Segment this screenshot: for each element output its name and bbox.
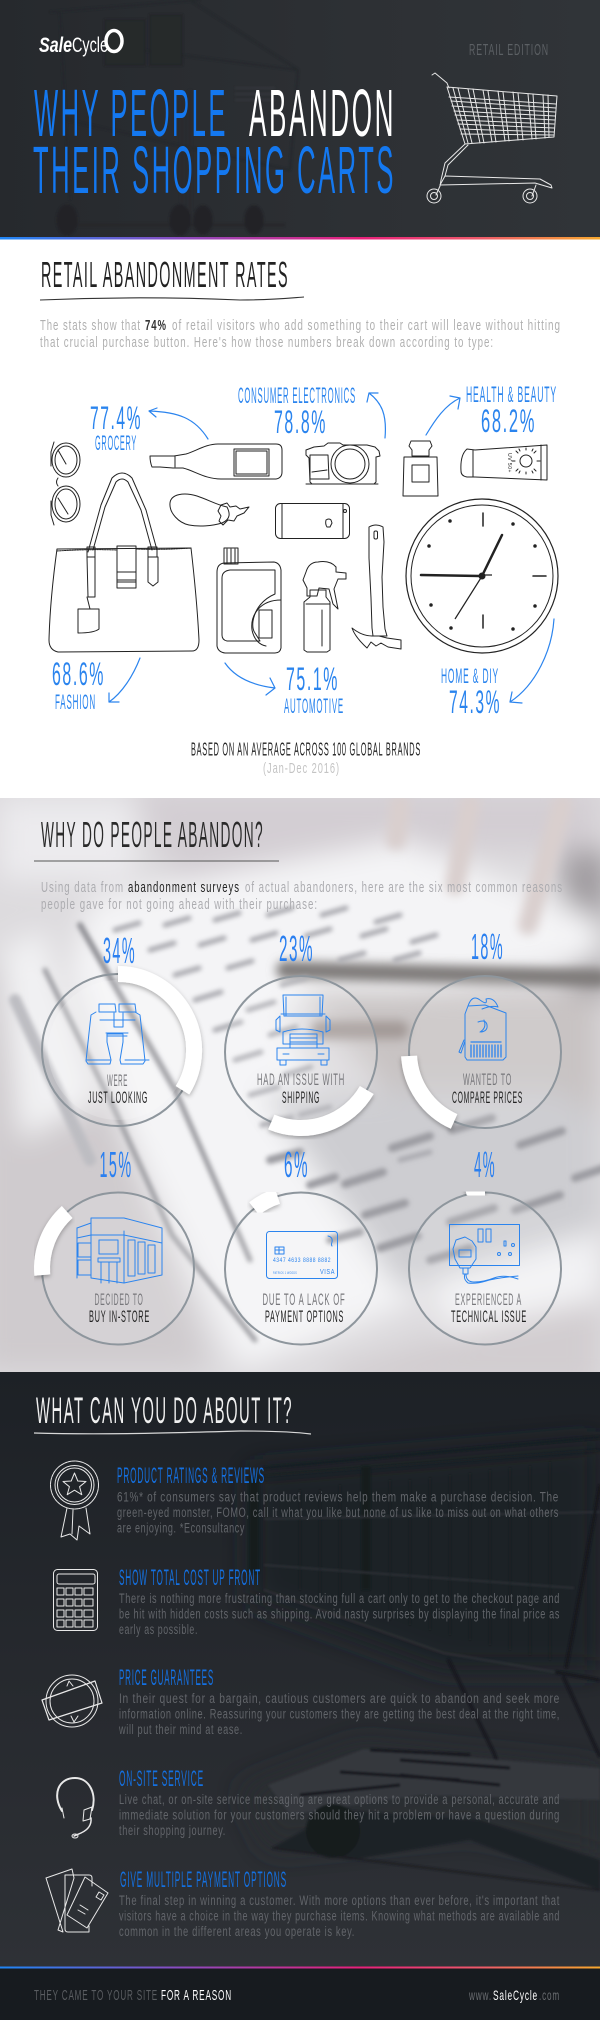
item: total cost: early as possible. — [119, 1622, 198, 1637]
circle stat: 23% shipping — [225, 928, 377, 1128]
item: total cost — [54, 1565, 560, 1637]
circle stat: 6% payment options: 6% — [284, 1144, 309, 1185]
icon: sun cream tube — [461, 445, 547, 480]
logo: SaleCycle: Sale — [39, 34, 72, 57]
icon: rosette medal — [50, 1461, 98, 1540]
background photo: blurred keyboard — [0, 790, 600, 1390]
heading underline — [34, 860, 279, 862]
panel: retail abandonment rates: 68.6% — [52, 656, 105, 692]
panel: why do people abandon — [0, 790, 600, 1390]
arrow: health and beauty — [426, 396, 460, 435]
item: price guarantees — [42, 1665, 560, 1737]
intro text: people gave for not going ahead with their purchase: — [41, 897, 318, 913]
circle stat: 15% buy in-store: 15% — [100, 1144, 132, 1185]
item: price guarantees: PRICE GUARANTEES — [119, 1665, 214, 1690]
icon: sunglasses — [51, 442, 80, 525]
icon: oil jug — [217, 548, 281, 653]
arrow: automotive — [225, 663, 275, 695]
icon: credit card: 4347 4633 8888 8882 — [273, 1257, 331, 1264]
icon: credit card: VISA — [320, 1269, 335, 1276]
footer url — [468, 1987, 560, 2003]
icon: headset — [57, 1778, 94, 1838]
panel: retail abandonment rates: FASHION — [55, 691, 96, 714]
stat: consumer electronics: 78.8% — [274, 404, 327, 440]
intro text: Using data from — [41, 880, 124, 896]
stat: automotive: 75.1% — [286, 661, 339, 697]
circle stat: 15% buy in-store — [42, 1144, 194, 1344]
item: product ratings — [50, 1461, 559, 1540]
icon: hammer — [352, 525, 401, 649]
circle stat: 34% just looking: WERE — [107, 1071, 128, 1090]
panel: retail abandonment rates: AUTOMOTIVE — [284, 695, 344, 718]
background photo: shopping cart — [240, 1437, 600, 1890]
intro text: The stats show that — [40, 318, 141, 334]
item: price guarantees: will put their mind at ease. — [118, 1722, 243, 1737]
item: on-site service: ON-SITE SERVICE — [119, 1766, 204, 1791]
icon: camera — [306, 443, 380, 484]
icon: plug and socket — [450, 1224, 520, 1283]
item: payment options — [46, 1867, 560, 1939]
stat: health and beauty: 68.2% — [481, 403, 536, 439]
intro text — [40, 318, 561, 351]
source note: (Jan-Dec 2016) — [263, 760, 340, 777]
icon: credit card: PATRICK J WOODS — [273, 1271, 297, 1275]
intro text — [41, 880, 563, 913]
icon: aubergine — [170, 494, 249, 526]
icon: spray bottle — [303, 562, 346, 652]
icon: shopping cart — [427, 73, 557, 203]
arrow: fashion — [109, 658, 140, 702]
title: WHY PEOPLE — [34, 76, 228, 151]
intro text: abandonment surveys — [128, 880, 240, 896]
panel: retail abandonment rates: 77.4% — [90, 400, 142, 436]
icon: wall clock — [406, 499, 558, 653]
heading underline — [40, 297, 304, 300]
panel: retail abandonment rates: 74.3% — [449, 684, 501, 720]
circle stat: 4% technical issue — [409, 1144, 561, 1344]
item: total cost: SHOW TOTAL COST UP FRONT — [119, 1565, 261, 1590]
footer tagline: THEY CAME TO YOUR SITE — [34, 1987, 158, 2004]
icon: handbag — [49, 473, 199, 652]
panel: retail abandonment rates: HOME & DIY — [441, 665, 499, 688]
circle stat: 6% payment options — [225, 1144, 377, 1344]
item: product ratings: PRODUCT RATINGS & REVIEWS — [117, 1463, 265, 1488]
stat: health and beauty — [466, 382, 557, 439]
icon: smartphone — [276, 504, 350, 538]
panel: header — [0, 0, 600, 237]
circle stat: 23% shipping: SHIPPING — [282, 1088, 320, 1107]
panel: retail abandonment rates: GROCERY — [95, 432, 137, 455]
circle stat: 23% shipping: 23% — [279, 928, 314, 969]
footer url: .com — [539, 1987, 560, 2003]
circle stat: 15% buy in-store: BUY IN-STORE — [89, 1307, 150, 1326]
circle stat: 15% buy in-store: DECIDED TO — [94, 1290, 144, 1309]
icon: shop front — [77, 1218, 162, 1283]
stat: grocery — [90, 400, 142, 455]
icon: price tag — [459, 998, 506, 1060]
stat: fashion — [52, 656, 105, 714]
footer url: www. — [468, 1987, 492, 2003]
logo: SaleCycle: Cycle — [72, 34, 108, 57]
item: on-site service — [57, 1766, 560, 1838]
icon: guarantee badge — [42, 1675, 102, 1727]
icon: sun cream tube: UV 50+ — [506, 453, 512, 473]
footer — [0, 1966, 600, 2020]
panel: retail abandonment rates — [40, 254, 561, 777]
footer tagline: FOR A REASON — [161, 1987, 232, 2004]
title — [33, 76, 396, 208]
circle stat: 34% just looking: 34% — [103, 930, 136, 971]
circle stat: 6% payment options: PAYMENT OPTIONS — [265, 1307, 344, 1326]
stat: automotive — [284, 661, 344, 718]
icon: perfume bottle — [403, 441, 438, 496]
icon: cards and phone — [46, 1869, 108, 1932]
circle stat: 34% just looking — [42, 930, 194, 1126]
circle stat: 18% compare prices: 18% — [471, 926, 504, 967]
arrow: grocery — [149, 408, 208, 439]
circle stat: 18% compare prices — [409, 926, 561, 1128]
arrow: home and DIY — [510, 619, 554, 703]
stat: home and DIY — [441, 665, 501, 720]
arrow: consumer electronics — [367, 393, 385, 438]
circle stat: 18% compare prices: WANTED TO — [463, 1070, 512, 1089]
icon: binoculars — [86, 1004, 149, 1064]
panel: what can you do about it — [0, 1372, 600, 1968]
circle stat: 34% just looking: JUST LOOKING — [88, 1088, 148, 1107]
intro text: 74% — [145, 318, 167, 334]
circle stat: 4% technical issue: 4% — [474, 1144, 496, 1185]
item: product ratings: are enjoying. *Econsultancy — [117, 1520, 245, 1536]
circle stat: 6% payment options: DUE TO A LACK OF — [262, 1290, 346, 1309]
gradient strip — [0, 237, 600, 240]
icon: credit card — [266, 1232, 338, 1278]
stat: consumer electronics — [238, 383, 356, 440]
logo: SaleCycle — [39, 30, 122, 57]
icon: wine bottle — [150, 444, 282, 479]
footer url: SaleCycle — [493, 1987, 538, 2003]
circle stat: 23% shipping: HAD AN ISSUE WITH — [257, 1070, 345, 1089]
header background: ghost shopping cart photo — [58, 15, 296, 235]
source note — [191, 740, 421, 777]
heading underline — [34, 1431, 311, 1434]
icon: calculator — [54, 1570, 98, 1630]
item: payment options: GIVE MULTIPLE PAYMENT OPTIONS — [120, 1867, 287, 1892]
icon: truck — [276, 995, 330, 1065]
panel: retail abandonment rates: CONSUMER ELECTRONICS — [238, 383, 356, 408]
item: payment options: common in the different areas you operate is key. — [119, 1924, 355, 1939]
item: on-site service: their shopping journey. — [119, 1823, 226, 1838]
